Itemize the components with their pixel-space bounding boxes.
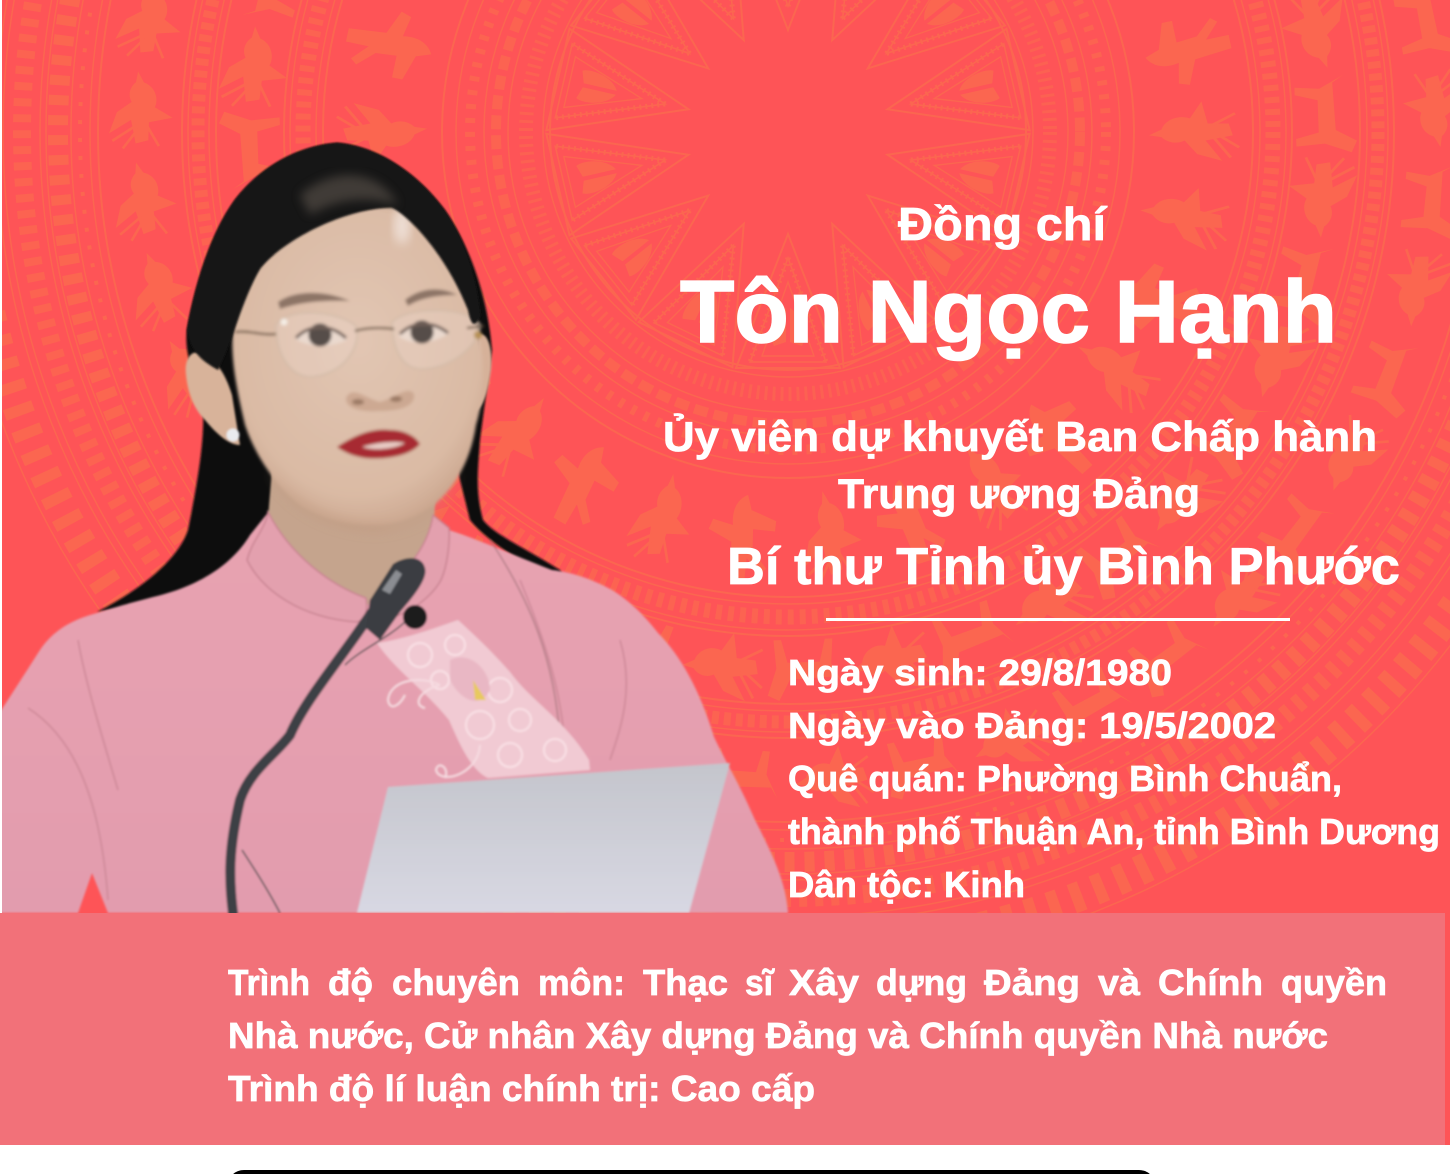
portrait: ears and earring — [186, 334, 491, 445]
professional qualification line 1: quyền — [1281, 962, 1387, 1003]
portrait: chin shadow — [270, 478, 444, 510]
portrait: microphone stand — [230, 612, 372, 913]
heading: Đồng chí: Đồng chí — [898, 198, 1108, 250]
portrait: hair strands over shoulder — [490, 540, 560, 740]
portrait: glasses — [276, 310, 480, 377]
personal details block — [788, 652, 1440, 905]
professional qualification line 1: môn: — [538, 962, 625, 1003]
portrait: forehead highlight — [394, 208, 410, 244]
professional qualification line 1: độ — [328, 962, 373, 1003]
education panel — [0, 913, 1445, 1145]
date of party admission: Ngày vào Đảng: 19/5/2002 — [788, 705, 1276, 746]
portrait: hair sheen — [300, 175, 398, 215]
portrait: paper sheet — [357, 763, 730, 913]
drum star petals — [546, 0, 1030, 368]
portrait: embroidery lace texture — [408, 635, 566, 767]
professional qualification line 1: Xây — [789, 962, 859, 1003]
portrait: hair front and top — [187, 143, 481, 370]
drum birds and animals — [108, 0, 1450, 812]
professional qualification line 1: chuyên — [392, 962, 520, 1003]
professional qualification line 1: Trình — [228, 962, 310, 1003]
portrait of Tôn Ngọc Hạnh — [0, 143, 788, 913]
professional qualification line 2: Nhà nước, Cử nhân Xây dựng Đảng và Chính quyền Nhà nước — [228, 1015, 1328, 1056]
professional qualification line 1: và — [1098, 962, 1141, 1003]
panel background — [0, 913, 1445, 1145]
professional qualification line 1: sĩ — [745, 962, 775, 1003]
role: party central committee line 2: Trung ương Đảng — [838, 470, 1200, 517]
role: party central committee line 1: Ủy viên dự khuyết Ban Chấp hành — [663, 412, 1377, 460]
next panel top edge — [228, 1170, 1155, 1174]
hometown line 1: Quê quán: Phường Bình Chuẩn, — [788, 758, 1342, 799]
portrait: embroidery — [377, 620, 590, 778]
heading: name: Tôn Ngọc Hạnh — [680, 262, 1337, 361]
professional qualification line 1: Chính — [1158, 962, 1263, 1003]
portrait: sleeve fold shading — [28, 580, 626, 900]
portrait: eyebrows — [278, 289, 457, 309]
professional qualification line 1: Thạc — [643, 962, 728, 1003]
hometown line 2: thành phố Thuận An, tỉnh Bình Dương — [788, 811, 1440, 852]
portrait: face — [232, 207, 484, 532]
professional qualification line 1: Đảng — [984, 962, 1080, 1003]
portrait: lips — [337, 430, 420, 458]
portrait: bare neck — [268, 470, 436, 606]
portrait: collar — [247, 512, 367, 622]
portrait: nose — [346, 391, 414, 411]
professional qualification line 1: dựng — [876, 962, 967, 1003]
political theory level: Trình độ lí luận chính trị: Cao cấp — [228, 1068, 815, 1109]
portrait: hair back — [97, 143, 575, 612]
portrait: eyes — [296, 326, 447, 346]
divider rule — [826, 618, 1290, 621]
ethnicity: Dân tộc: Kinh — [788, 864, 1025, 905]
date of birth: Ngày sinh: 29/8/1980 — [788, 652, 1172, 693]
role: provincial party secretary: Bí thư Tỉnh ủy Bình Phước — [727, 538, 1400, 596]
portrait: ao dai dress — [0, 470, 788, 913]
